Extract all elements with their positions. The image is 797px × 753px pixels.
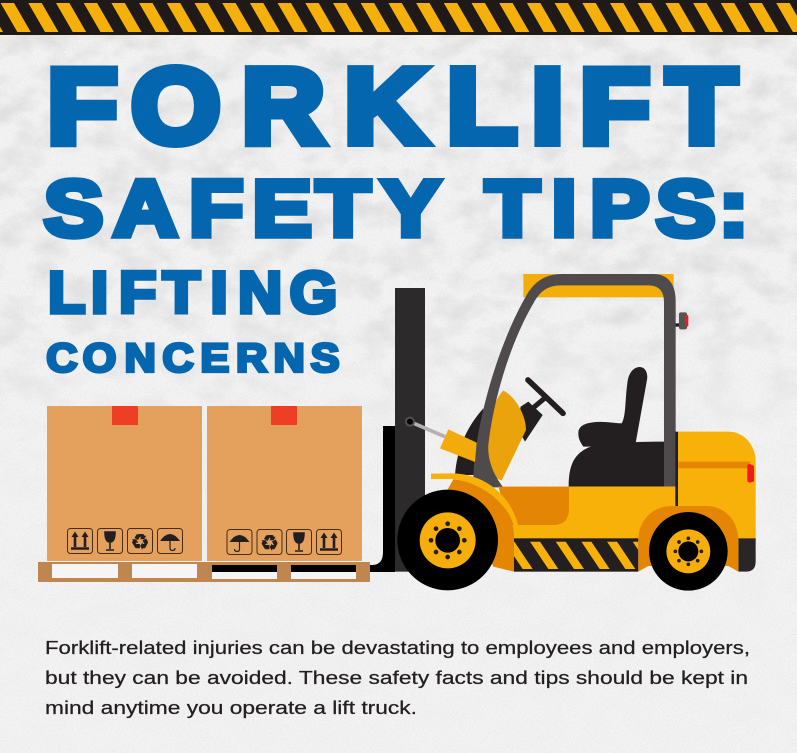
title line: CONCERNS: CONCERNS	[46, 336, 339, 380]
canopy frame	[473, 274, 676, 487]
icon: keep dry umbrella	[227, 530, 252, 554]
title line: SAFETY TIPS: SAFETY TIPS:	[44, 164, 748, 253]
seat	[569, 367, 665, 487]
dashboard back	[455, 408, 485, 475]
tilt cylinder	[405, 417, 477, 462]
body main	[503, 487, 676, 540]
rear wheel	[649, 512, 728, 591]
steering column	[517, 402, 543, 442]
cardboard box: right	[207, 406, 362, 561]
icon: recycle: ♻	[131, 530, 149, 554]
paragraph line 1: Forklift-related injuries can be devastating to employees and employers,	[45, 638, 750, 658]
forklift	[395, 274, 756, 591]
icon: fragile	[98, 528, 122, 554]
hazard strip on chassis	[514, 538, 638, 572]
cardboard box: left	[47, 406, 202, 561]
title	[44, 47, 748, 380]
rear counterweight	[675, 432, 756, 572]
canopy roof	[523, 274, 674, 297]
icon: keep dry umbrella	[158, 528, 182, 554]
front fender	[431, 473, 519, 572]
fork resting under the pallet	[212, 426, 395, 572]
intro paragraph	[45, 638, 750, 718]
paragraph line 2: but they can be avoided. These safety facts and tips should be kept in	[45, 668, 748, 688]
icon: recycle: ♻	[260, 531, 279, 555]
dashboard panel	[485, 391, 526, 481]
body orange panel	[498, 487, 569, 525]
front wheel	[397, 490, 498, 590]
hazard stripe band	[0, 0, 797, 35]
icon: this way up	[316, 530, 342, 554]
title line: FORKLIFT: FORKLIFT	[48, 47, 737, 166]
pallet	[38, 562, 370, 582]
title line: LIFTING: LIFTING	[48, 260, 337, 325]
steering wheel	[528, 380, 563, 413]
icon: this way up	[68, 528, 92, 554]
rear fender	[638, 506, 738, 572]
paragraph line 3: mind anytime you operate a lift truck.	[45, 698, 417, 718]
rear light	[675, 312, 688, 329]
mast	[395, 288, 425, 572]
icon: fragile	[286, 530, 312, 554]
